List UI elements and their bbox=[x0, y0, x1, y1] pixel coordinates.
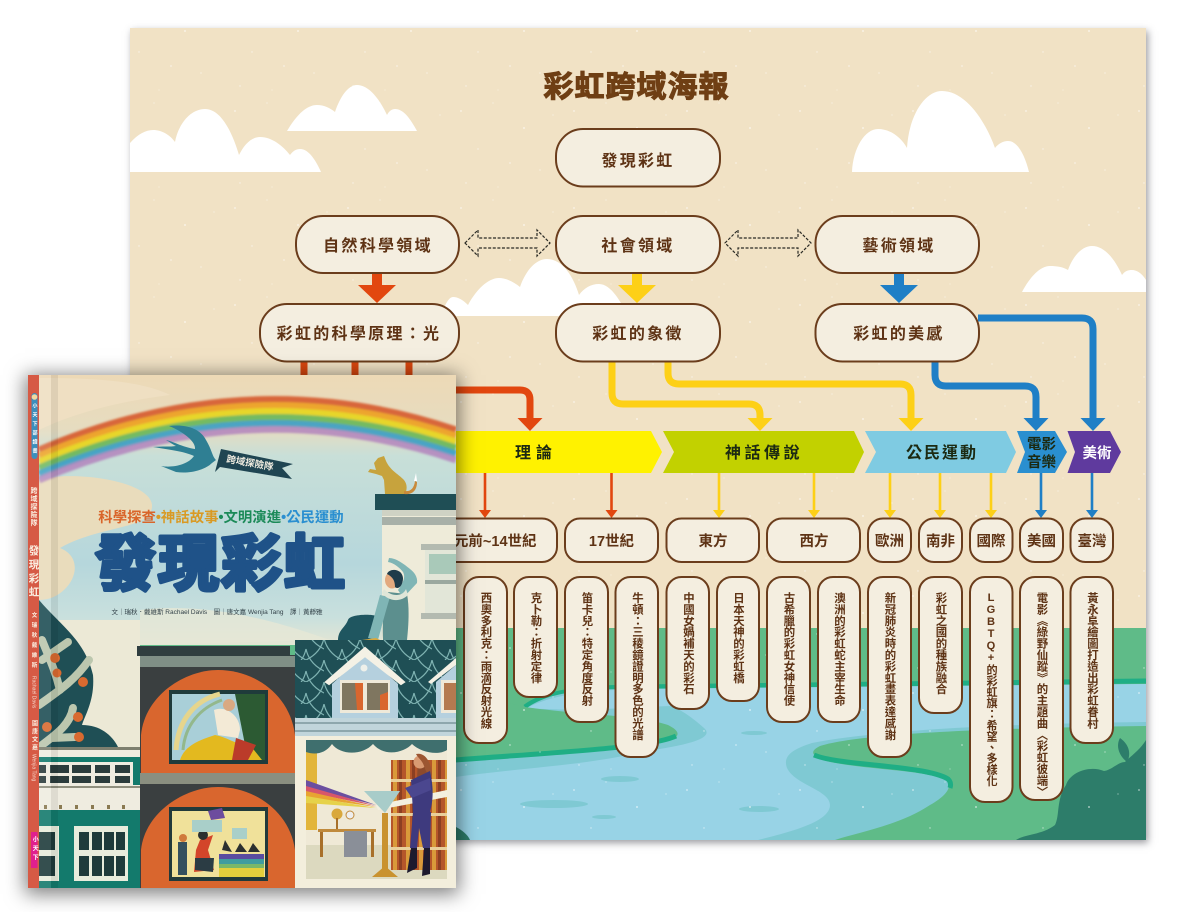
speckle texture bbox=[130, 28, 1146, 840]
box: 美國 bbox=[1020, 518, 1063, 562]
detail: 西奧多利克 bbox=[464, 577, 507, 743]
box: 彩虹的美感 bbox=[816, 304, 979, 362]
double arrow: society to arts bbox=[725, 230, 811, 256]
box: 發現彩虹: 發現彩虹 bbox=[601, 152, 675, 170]
detail: LGBTQ+: LGBTQ+的彩虹旗：希望、多樣化 bbox=[985, 592, 998, 787]
bookcase bbox=[391, 760, 447, 870]
spine series: 跨域探險隊 bbox=[30, 486, 38, 527]
box: 歐洲 bbox=[868, 518, 911, 562]
woman in purple suit bbox=[405, 754, 433, 876]
detail: 中國女媧: 中國女媧補天的彩石 bbox=[682, 591, 695, 695]
box: 彩虹的象徵 bbox=[556, 304, 720, 362]
detail: 黃永阜: 黃永阜繪圖打造出彩虹眷村 bbox=[1086, 591, 1099, 729]
detail: 澳洲: 澳洲的彩虹蛇主宰生命 bbox=[833, 591, 846, 707]
detail: 澳洲 bbox=[818, 577, 860, 722]
box: 東方: 東方 bbox=[698, 532, 728, 550]
cover sky bbox=[39, 375, 456, 645]
box: 17世紀 bbox=[565, 518, 658, 562]
detail: 笛卡兒: 笛卡兒：特定角度反射 bbox=[580, 591, 593, 707]
light beam bbox=[306, 780, 447, 810]
banner: 電影音樂: 音樂 bbox=[1027, 453, 1056, 471]
box: 藝術領域: 藝術領域 bbox=[862, 236, 936, 255]
detail: LGBTQ+ bbox=[970, 577, 1012, 802]
cover title: 發現彩虹 bbox=[95, 530, 347, 598]
box: 自然科學領域: 自然科學領域 bbox=[323, 236, 433, 255]
box: 臺灣 bbox=[1070, 518, 1113, 562]
banner: 電影音樂 bbox=[1017, 431, 1067, 473]
cover subtitle: 科學探查•神話故事•文明演進•公民運動 bbox=[98, 508, 344, 526]
detail: 牛頓 bbox=[616, 577, 658, 757]
detail: 西奧多利克: 西奧多利克：雨滴反射光線 bbox=[480, 592, 492, 729]
spine credits: 文瑞秋戴維斯 bbox=[30, 611, 37, 672]
detail: 彩虹之國: 彩虹之國的種族融合 bbox=[934, 592, 947, 695]
box: 國際: 國際 bbox=[976, 533, 1006, 550]
spine publisher logo: 小天下 bbox=[31, 835, 38, 863]
building wall with window bbox=[375, 494, 456, 645]
landscape: ground and river bbox=[130, 628, 1146, 840]
box: 西方: 西方 bbox=[800, 532, 828, 550]
box: 社會領域 bbox=[556, 216, 720, 273]
banner: 理論 bbox=[400, 431, 662, 473]
spine bbox=[28, 375, 40, 888]
panel: book cover bbox=[28, 375, 456, 888]
detail: 黃永阜 bbox=[1070, 577, 1113, 743]
banner: 神話傳說 bbox=[663, 431, 864, 473]
detail: 新冠肺炎: 新冠肺炎時的彩虹畫表達感謝 bbox=[884, 591, 896, 740]
spine credits: Wenjia Tang bbox=[30, 754, 36, 782]
spine credits bbox=[30, 611, 38, 782]
box: 南非 bbox=[919, 518, 962, 562]
panel: rainbow poster bbox=[130, 28, 1146, 840]
box: 歐洲: 歐洲 bbox=[875, 532, 904, 550]
arrow: yellow down bbox=[618, 274, 656, 303]
blue connector to 美術 bbox=[978, 318, 1106, 431]
detail: 克卜勒: 克卜勒：折射定律 bbox=[530, 591, 542, 684]
flag with series name: 跨域探險隊 bbox=[225, 453, 275, 473]
detail: 新冠肺炎 bbox=[868, 577, 911, 757]
prism and stand bbox=[364, 791, 400, 877]
spine credits: Rachael Davis bbox=[30, 676, 36, 709]
person at window bbox=[338, 558, 417, 640]
box: 彩虹的科學原理：光: 彩虹的科學原理：光 bbox=[277, 325, 441, 343]
banner-to-box arrows bbox=[479, 473, 1098, 518]
box: 南非: 南非 bbox=[926, 533, 955, 550]
box: 發現彩虹 bbox=[556, 129, 720, 186]
interior picture: prism and woman bbox=[306, 740, 447, 879]
banner: 電影音樂: 電影 bbox=[1027, 435, 1056, 453]
spine credits: 圖唐文嘉 bbox=[30, 720, 38, 752]
box: 西元前~14世紀 bbox=[420, 518, 557, 562]
spine publisher logo bbox=[31, 832, 38, 868]
detail: 笛卡兒 bbox=[565, 577, 608, 722]
detail: 古希臘: 古希臘的彩虹女神信使 bbox=[782, 591, 795, 707]
box: 自然科學領域 bbox=[296, 216, 459, 273]
box: 彩虹的科學原理：光 bbox=[260, 304, 459, 362]
table with instruments bbox=[318, 808, 376, 857]
cat bbox=[368, 456, 417, 494]
detail: 電影 bbox=[1020, 577, 1063, 800]
lower-left cream wall bbox=[39, 620, 140, 750]
detail: 日本天神 bbox=[717, 577, 759, 701]
box: 西方 bbox=[767, 518, 860, 562]
box: 臺灣: 臺灣 bbox=[1078, 533, 1106, 550]
detail: 古希臘 bbox=[767, 577, 810, 722]
box: 國際 bbox=[970, 518, 1012, 562]
blue connector to 電影音樂 bbox=[935, 362, 1048, 431]
detail: 彩虹之國 bbox=[919, 577, 962, 713]
box: 東方 bbox=[666, 518, 759, 562]
banner: 神話傳說: 神話傳說 bbox=[725, 443, 803, 462]
tree bbox=[39, 600, 118, 747]
box: 彩虹的美感: 彩虹的美感 bbox=[853, 324, 945, 343]
painting: goddess with rainbow bbox=[169, 690, 268, 764]
box: 藝術領域 bbox=[816, 216, 979, 273]
detail: 日本天神: 日本天神的彩虹橋 bbox=[732, 592, 745, 684]
arrow: blue down bbox=[880, 274, 918, 303]
cream wall bbox=[295, 736, 456, 888]
clouds bbox=[130, 85, 1146, 316]
painting: rainbow march bbox=[169, 807, 268, 881]
author line: 文｜瑞秋．戴維斯 Rachael Davis 圖｜唐文嘉 Wenjia Tang 譯｜黃靜雅 bbox=[111, 607, 323, 616]
box: 西元前~14世紀: 西元前~14世紀 bbox=[439, 532, 537, 550]
yellow connector to 公民運動 bbox=[668, 362, 924, 431]
banner: 公民運動 bbox=[865, 431, 1016, 473]
detail: 中國女媧 bbox=[666, 577, 709, 709]
roof with dormers bbox=[295, 640, 456, 736]
box: 17世紀: 17世紀 bbox=[589, 532, 635, 550]
flag with series name bbox=[215, 449, 293, 479]
box: 彩虹的象徵: 彩虹的象徵 bbox=[592, 324, 684, 343]
box: 美國: 美國 bbox=[1027, 532, 1056, 550]
spine logo: 小天下部讀書 bbox=[32, 402, 38, 457]
double arrow: science to society bbox=[465, 230, 550, 256]
detail: 克卜勒 bbox=[514, 577, 557, 697]
detail: 電影: 電影《綠野仙蹤》的主題曲〈彩虹彼端〉 bbox=[1036, 592, 1048, 797]
banner: 理論: 理論 bbox=[515, 443, 557, 462]
banner: 公民運動: 公民運動 bbox=[906, 444, 978, 462]
curtain bbox=[306, 740, 447, 753]
middle building with arches bbox=[137, 646, 295, 888]
box: 社會領域: 社會領域 bbox=[601, 236, 675, 255]
poster background sky bbox=[130, 28, 1146, 840]
detail: 牛頓: 牛頓：三稜鏡證明多色的光譜 bbox=[631, 591, 644, 741]
banner: 美術: 美術 bbox=[1082, 444, 1112, 462]
sky patches bbox=[39, 378, 330, 645]
red connector stubs and arrow to 理論 bbox=[304, 362, 542, 431]
left building bbox=[39, 747, 140, 888]
hinge shading bbox=[39, 375, 51, 888]
arrow: red down bbox=[358, 274, 396, 303]
banner: 美術 bbox=[1068, 431, 1121, 473]
swallow bbox=[153, 426, 216, 473]
yellow connector to 神話傳說 bbox=[612, 362, 772, 431]
rainbow bbox=[39, 399, 456, 480]
title: 彩虹跨域海報 bbox=[544, 71, 730, 104]
